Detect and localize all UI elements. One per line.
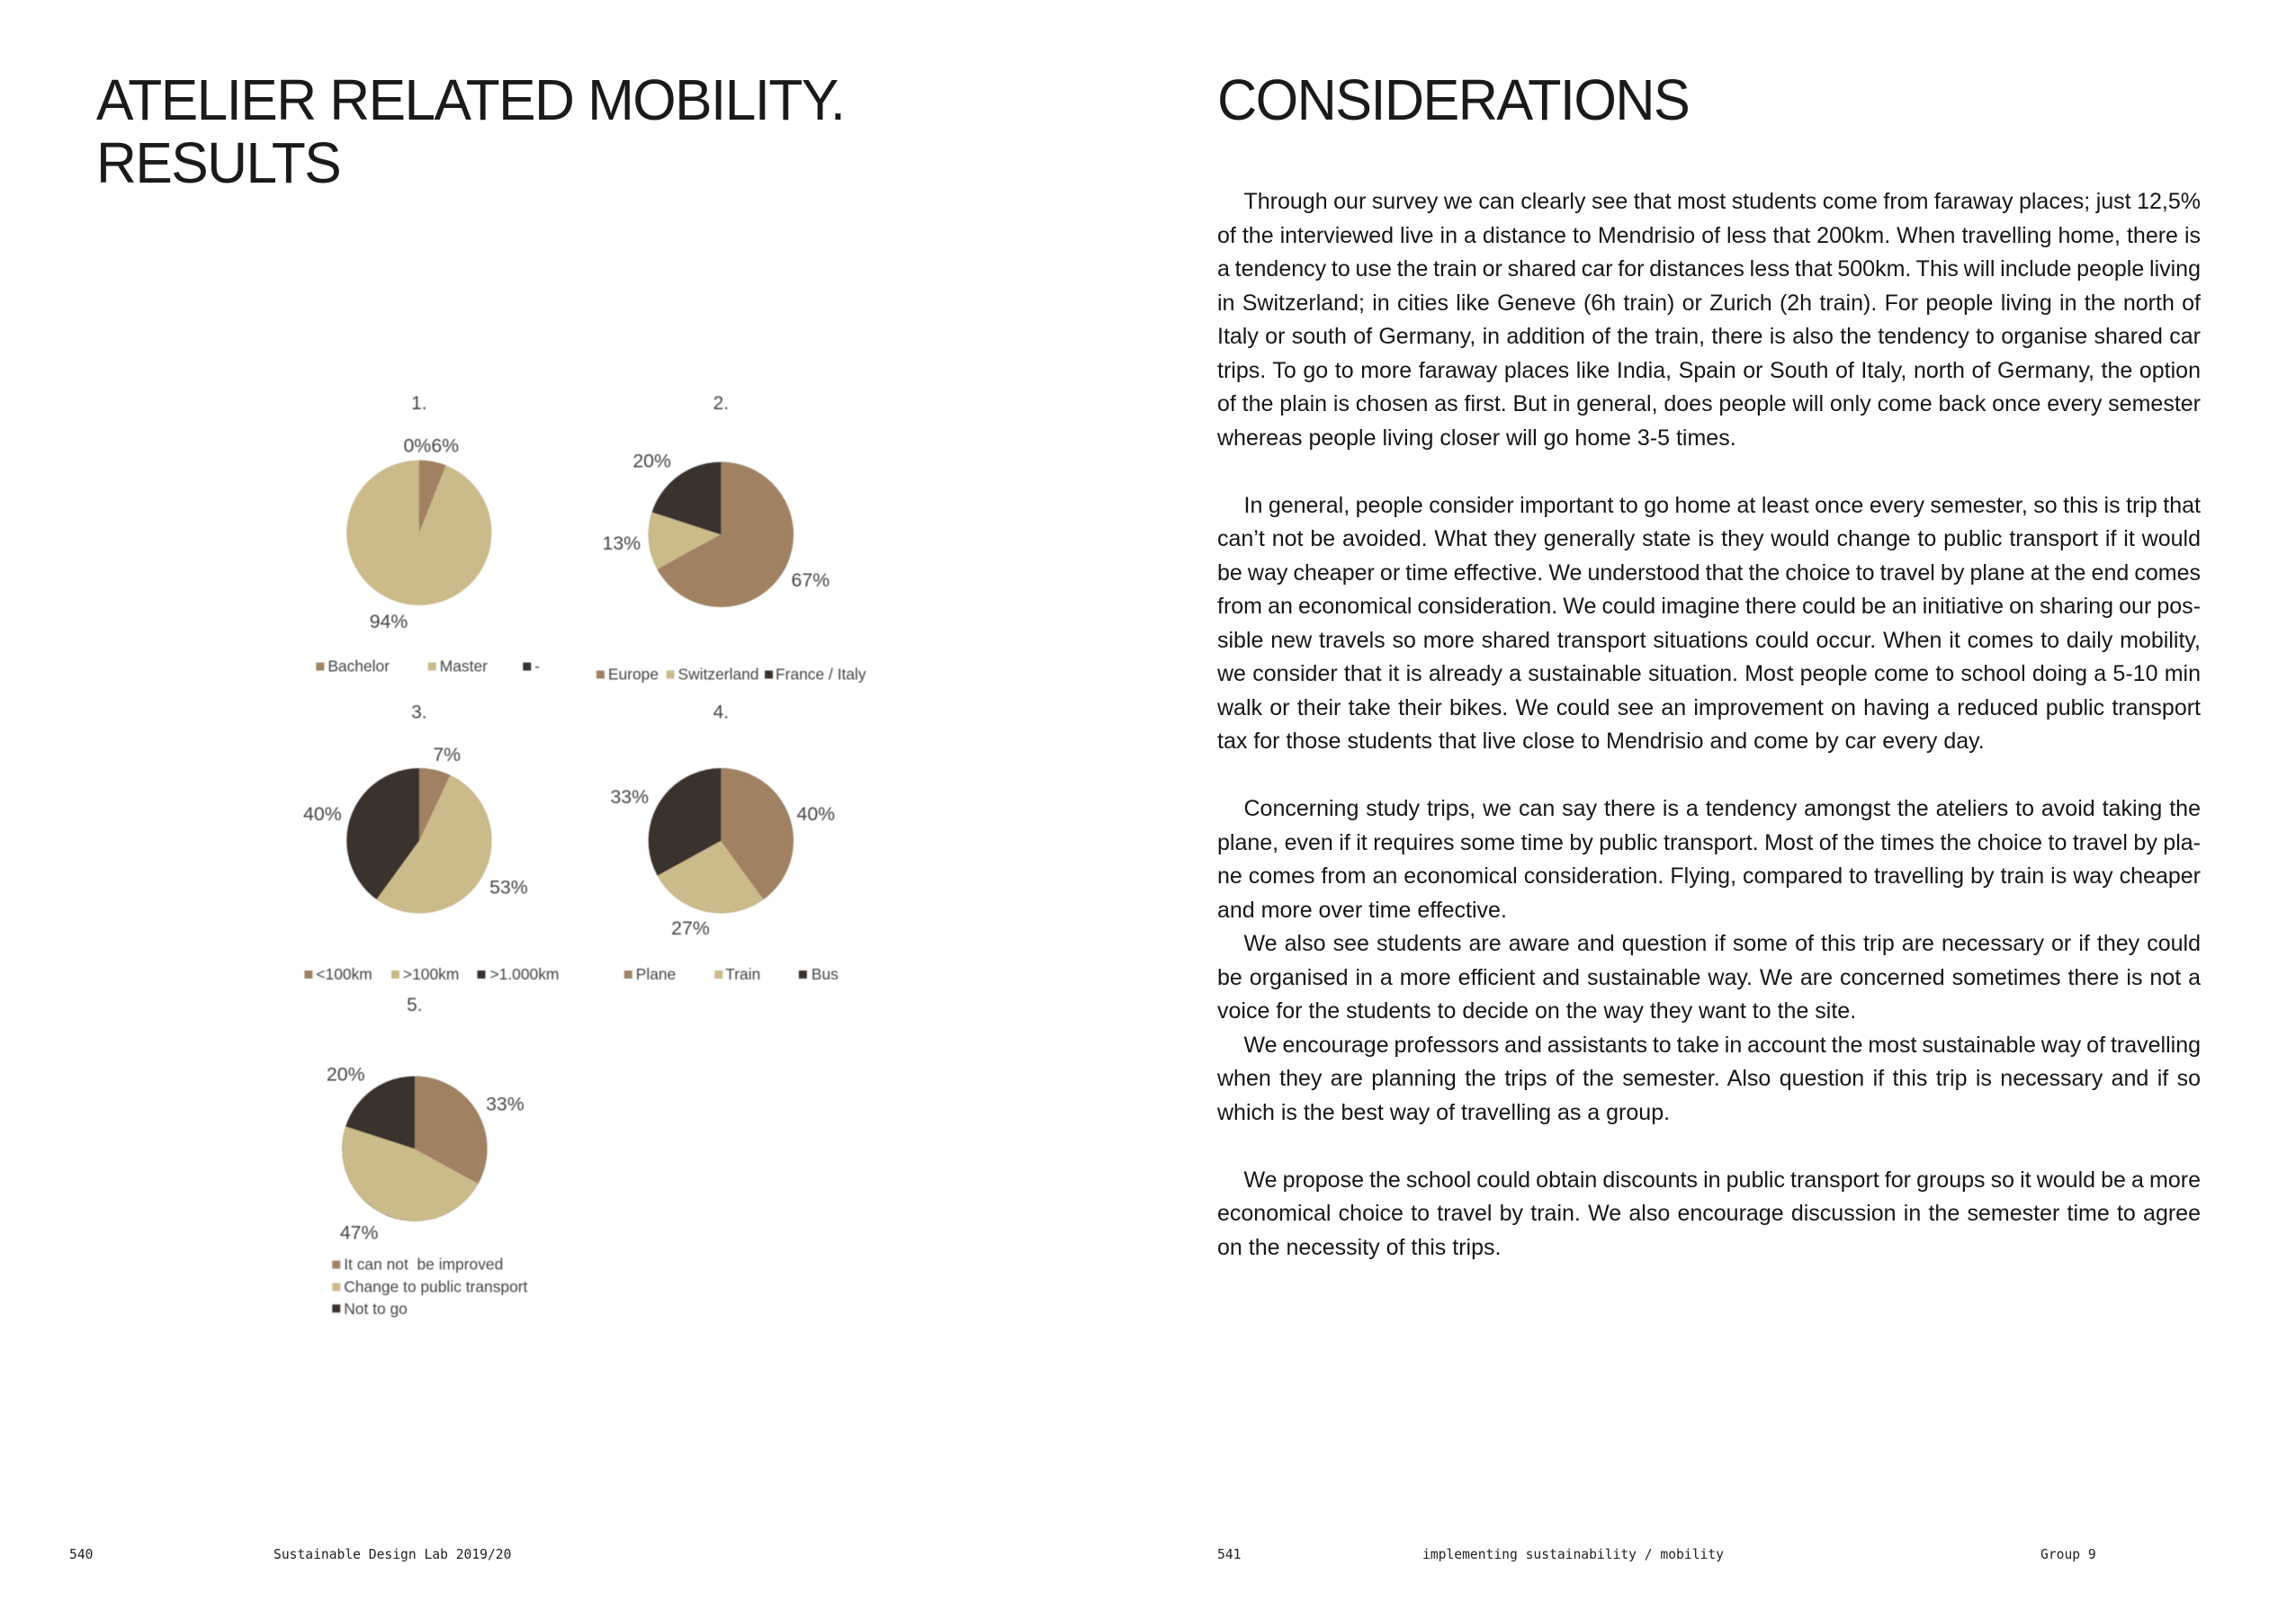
pie chart 5: improvement: It can not be improved bbox=[344, 1255, 503, 1273]
pie chart 2: origin: 2. bbox=[713, 393, 729, 414]
title: left page: ATELIER RELATED MOBILITY. bbox=[96, 67, 844, 132]
paragraph: survey findings: in Switzerland; in cities like Geneve (6h train) or Zurich (2h train). For people living in the north of bbox=[1217, 291, 2201, 316]
pie chart 2: origin: 20% bbox=[632, 451, 671, 472]
paragraph: student awareness: We also see students are aware and question if some of this trip are necessary or if they could bbox=[1243, 931, 2201, 956]
pie chart 3: distance: 3. bbox=[411, 702, 427, 722]
paragraph: going home: sible new travels so more shared transport situations could occur. When it comes to daily mobility, bbox=[1217, 628, 2201, 653]
paragraph: proposal: We propose the school could obtain discounts in public transport for groups so it would be a more bbox=[1243, 1167, 2201, 1193]
pie chart 5: improvement: Change to public transport bbox=[344, 1277, 528, 1295]
paragraph: survey findings: of the interviewed live in a distance to Mendrisio of less that 200km. When travelling home, there is bbox=[1217, 223, 2201, 248]
paragraph: survey findings bbox=[1217, 189, 2201, 451]
paragraph: student awareness bbox=[1217, 931, 2201, 1024]
footer: section name: implementing sustainability / mobility bbox=[1422, 1547, 1724, 1562]
paragraph: survey findings: Italy or south of Germany, in addition of the train, there is also the tendency to organise shared car bbox=[1217, 324, 2201, 349]
pie chart 4: transport mode: Train bbox=[725, 965, 760, 983]
paragraph: study trips: plane, even if it requires some time by public transport. Most of the times the choice to travel by pla- bbox=[1217, 830, 2201, 855]
pie chart 2: origin: 13% bbox=[602, 532, 641, 554]
pie chart 5: improvement: 33% bbox=[486, 1093, 525, 1114]
pie chart 1: study level: 94% bbox=[370, 611, 408, 632]
paragraph: proposal bbox=[1217, 1167, 2201, 1260]
paragraph: study trips bbox=[1217, 796, 2201, 923]
pie chart 5: improvement: 20% bbox=[327, 1063, 365, 1085]
pie chart 2: origin: Europe bbox=[608, 666, 659, 684]
body text: considerations bbox=[1217, 189, 2201, 1260]
pie chart 4: transport mode: Bus bbox=[812, 965, 839, 983]
pie chart 1: study level: 1. bbox=[411, 393, 427, 414]
pie chart 4: transport mode: Plane bbox=[636, 965, 676, 983]
pie chart 3: distance: >100km bbox=[403, 965, 459, 983]
paragraph: going home: we consider that it is already a sustainable situation. Most people come to school doing a 5-10 min bbox=[1217, 661, 2201, 686]
paragraph: student awareness: voice for the students to decide on the way they want to the site. bbox=[1217, 998, 1856, 1024]
footer: page number 540: 540 bbox=[69, 1547, 93, 1562]
title: right page: CONSIDERATIONS bbox=[1217, 67, 1689, 132]
paragraph: encouraging professors: when they are planning the trips of the semester. Also question if this trip is necessary and if so bbox=[1217, 1066, 2201, 1091]
paragraph: survey findings: of the plain is chosen as first. But in general, does people will only come back once every semester bbox=[1217, 391, 2201, 416]
footer: page number 541: 541 bbox=[1217, 1547, 1241, 1562]
paragraph: survey findings: a tendency to use the train or shared car for distances less that 500km. This will include people living bbox=[1217, 256, 2201, 282]
pie chart 2: origin: 67% bbox=[792, 569, 830, 591]
paragraph: going home: can’t not be avoided. What they generally state is they would change to public transport if it would bbox=[1217, 526, 2201, 551]
paragraph: going home: from an economical consideration. We could imagine there could be an initiative on sharing our pos- bbox=[1217, 594, 2201, 619]
paragraph: survey findings: trips. To go to more faraway places like India, Spain or South of Italy, north of Germany, the option bbox=[1217, 358, 2201, 383]
pie chart 3: distance: 7% bbox=[433, 744, 461, 765]
pie chart 3: distance: 53% bbox=[489, 876, 528, 898]
pie chart 1: study level: 0% bbox=[403, 435, 431, 457]
paragraph: study trips: and more over time effective. bbox=[1217, 898, 1507, 923]
pie chart 1: study level: Master bbox=[440, 657, 488, 675]
paragraph: going home: walk or their take their bikes. We could see an improvement on having a reduced public transport bbox=[1217, 695, 2201, 720]
pie chart 5: improvement: Not to go bbox=[344, 1300, 408, 1318]
pie chart 3: distance: 40% bbox=[303, 803, 342, 825]
pie chart 1: study level: - bbox=[534, 657, 540, 675]
paragraph: study trips: Concerning study trips, we can say there is a tendency amongst the ateliers to avoid taking the bbox=[1243, 796, 2201, 821]
paragraph: proposal: on the necessity of this trips. bbox=[1217, 1235, 1501, 1260]
footer: group: Group 9 bbox=[2040, 1547, 2096, 1562]
pie chart 3: distance: >1.000km bbox=[489, 965, 559, 983]
pie chart 3: distance bbox=[303, 702, 559, 983]
pie chart 4: transport mode: 33% bbox=[610, 786, 649, 808]
footer: publication name: Sustainable Design Lab 2019/20 bbox=[274, 1547, 511, 1562]
pie chart 4: transport mode: 27% bbox=[671, 917, 710, 939]
pie chart 2: origin: France / Italy bbox=[776, 666, 866, 684]
paragraph: encouraging professors: We encourage professors and assistants to take in account the most sustainable way of travelling bbox=[1243, 1033, 2201, 1058]
paragraph: student awareness: be organised in a more efficient and sustainable way. We are concerned sometimes there is not a bbox=[1217, 965, 2201, 990]
paragraph: going home: tax for those students that live close to Mendrisio and come by car every day. bbox=[1217, 729, 1985, 754]
title: left page: RESULTS bbox=[96, 130, 340, 195]
pie chart 4: transport mode bbox=[610, 702, 839, 983]
pie chart 4: transport mode: 40% bbox=[796, 803, 835, 825]
pie chart 5: improvement bbox=[327, 995, 528, 1318]
paragraph: going home: be way cheaper or time effective. We understood that the choice to travel by plane at the end comes bbox=[1217, 560, 2201, 586]
paragraph: proposal: economical choice to travel by train. We also encourage discussion in the semester time to agree bbox=[1217, 1201, 2201, 1226]
pie chart 1: study level: Bachelor bbox=[327, 657, 390, 675]
paragraph: survey findings: Through our survey we can clearly see that most students come from faraway places; just 12,5% bbox=[1243, 189, 2201, 214]
pie chart 5: improvement: 5. bbox=[407, 995, 423, 1015]
pie chart 2: origin bbox=[596, 393, 866, 684]
pie chart 1: study level: 6% bbox=[431, 435, 459, 457]
paragraph: encouraging professors: which is the best way of travelling as a group. bbox=[1217, 1100, 1670, 1125]
paragraph: study trips: ne comes from an economical consideration. Flying, compared to travelling by train is way cheaper bbox=[1217, 863, 2201, 889]
title: left page bbox=[96, 67, 844, 195]
pie chart 5: improvement: 47% bbox=[340, 1222, 379, 1244]
paragraph: survey findings: whereas people living closer will go home 3-5 times. bbox=[1217, 425, 1736, 451]
paragraph: going home bbox=[1217, 493, 2201, 754]
paragraph: encouraging professors bbox=[1217, 1033, 2201, 1125]
paragraph: going home: In general, people consider important to go home at least once every semester, so this is trip that bbox=[1243, 493, 2201, 518]
pie chart 4: transport mode: 4. bbox=[713, 702, 729, 722]
pie chart 2: origin: Switzerland bbox=[678, 666, 759, 684]
pie chart 3: distance: <100km bbox=[316, 965, 372, 983]
pie chart 1: study level bbox=[316, 393, 540, 675]
